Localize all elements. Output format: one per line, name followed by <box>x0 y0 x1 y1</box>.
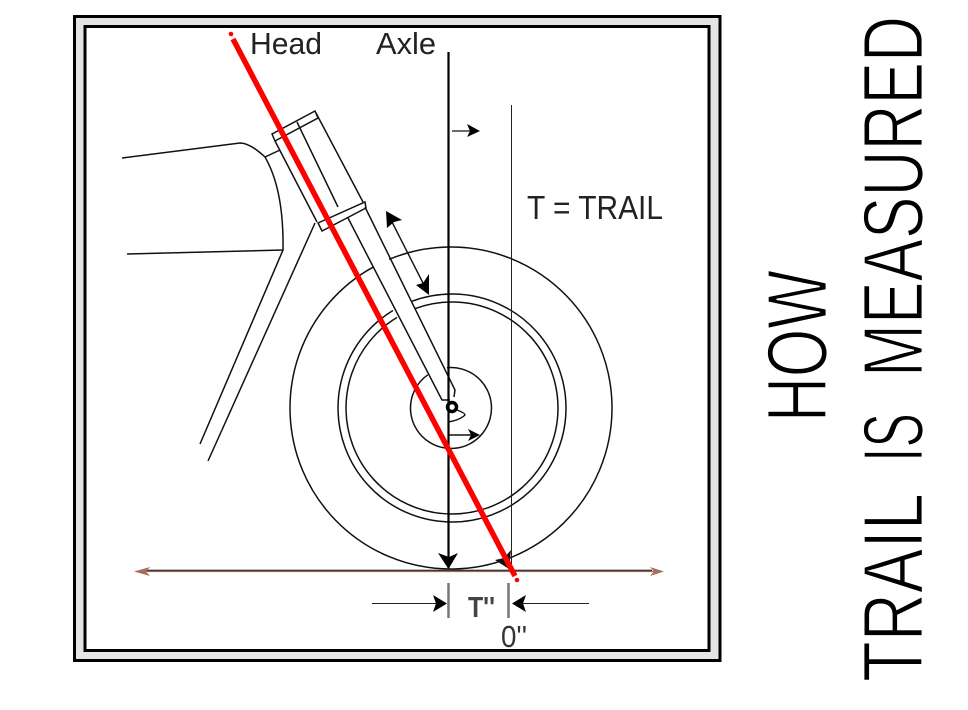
axle vertical line with arrow <box>438 52 458 569</box>
double arrow: fork travel <box>386 211 429 295</box>
label: Head: Head <box>250 26 322 61</box>
trail measurement marks <box>372 583 589 618</box>
label: T = TRAIL: T = TRAIL <box>527 189 663 226</box>
trail reference vertical line <box>510 105 512 570</box>
small arrow at trail contact point <box>495 550 511 569</box>
front fork <box>272 111 455 400</box>
title line: HOW: HOW <box>750 270 846 422</box>
arrow: upper right <box>452 124 480 137</box>
label: T inches: T'' <box>468 592 495 624</box>
label: 0 inches: 0'' <box>501 619 527 654</box>
ground line <box>134 567 664 576</box>
title line: TRAIL IS MEASURED: IS <box>846 413 942 462</box>
diagram frame <box>74 16 720 660</box>
label: Axle: Axle <box>376 26 436 61</box>
front wheel <box>240 197 662 619</box>
red steering head line <box>229 32 519 582</box>
title line: TRAIL IS MEASURED: TRAIL <box>846 493 942 682</box>
title line: TRAIL IS MEASURED <box>846 16 942 682</box>
arrow: hub right <box>449 429 480 441</box>
motorcycle frame outline <box>122 143 315 461</box>
axle <box>448 402 465 422</box>
